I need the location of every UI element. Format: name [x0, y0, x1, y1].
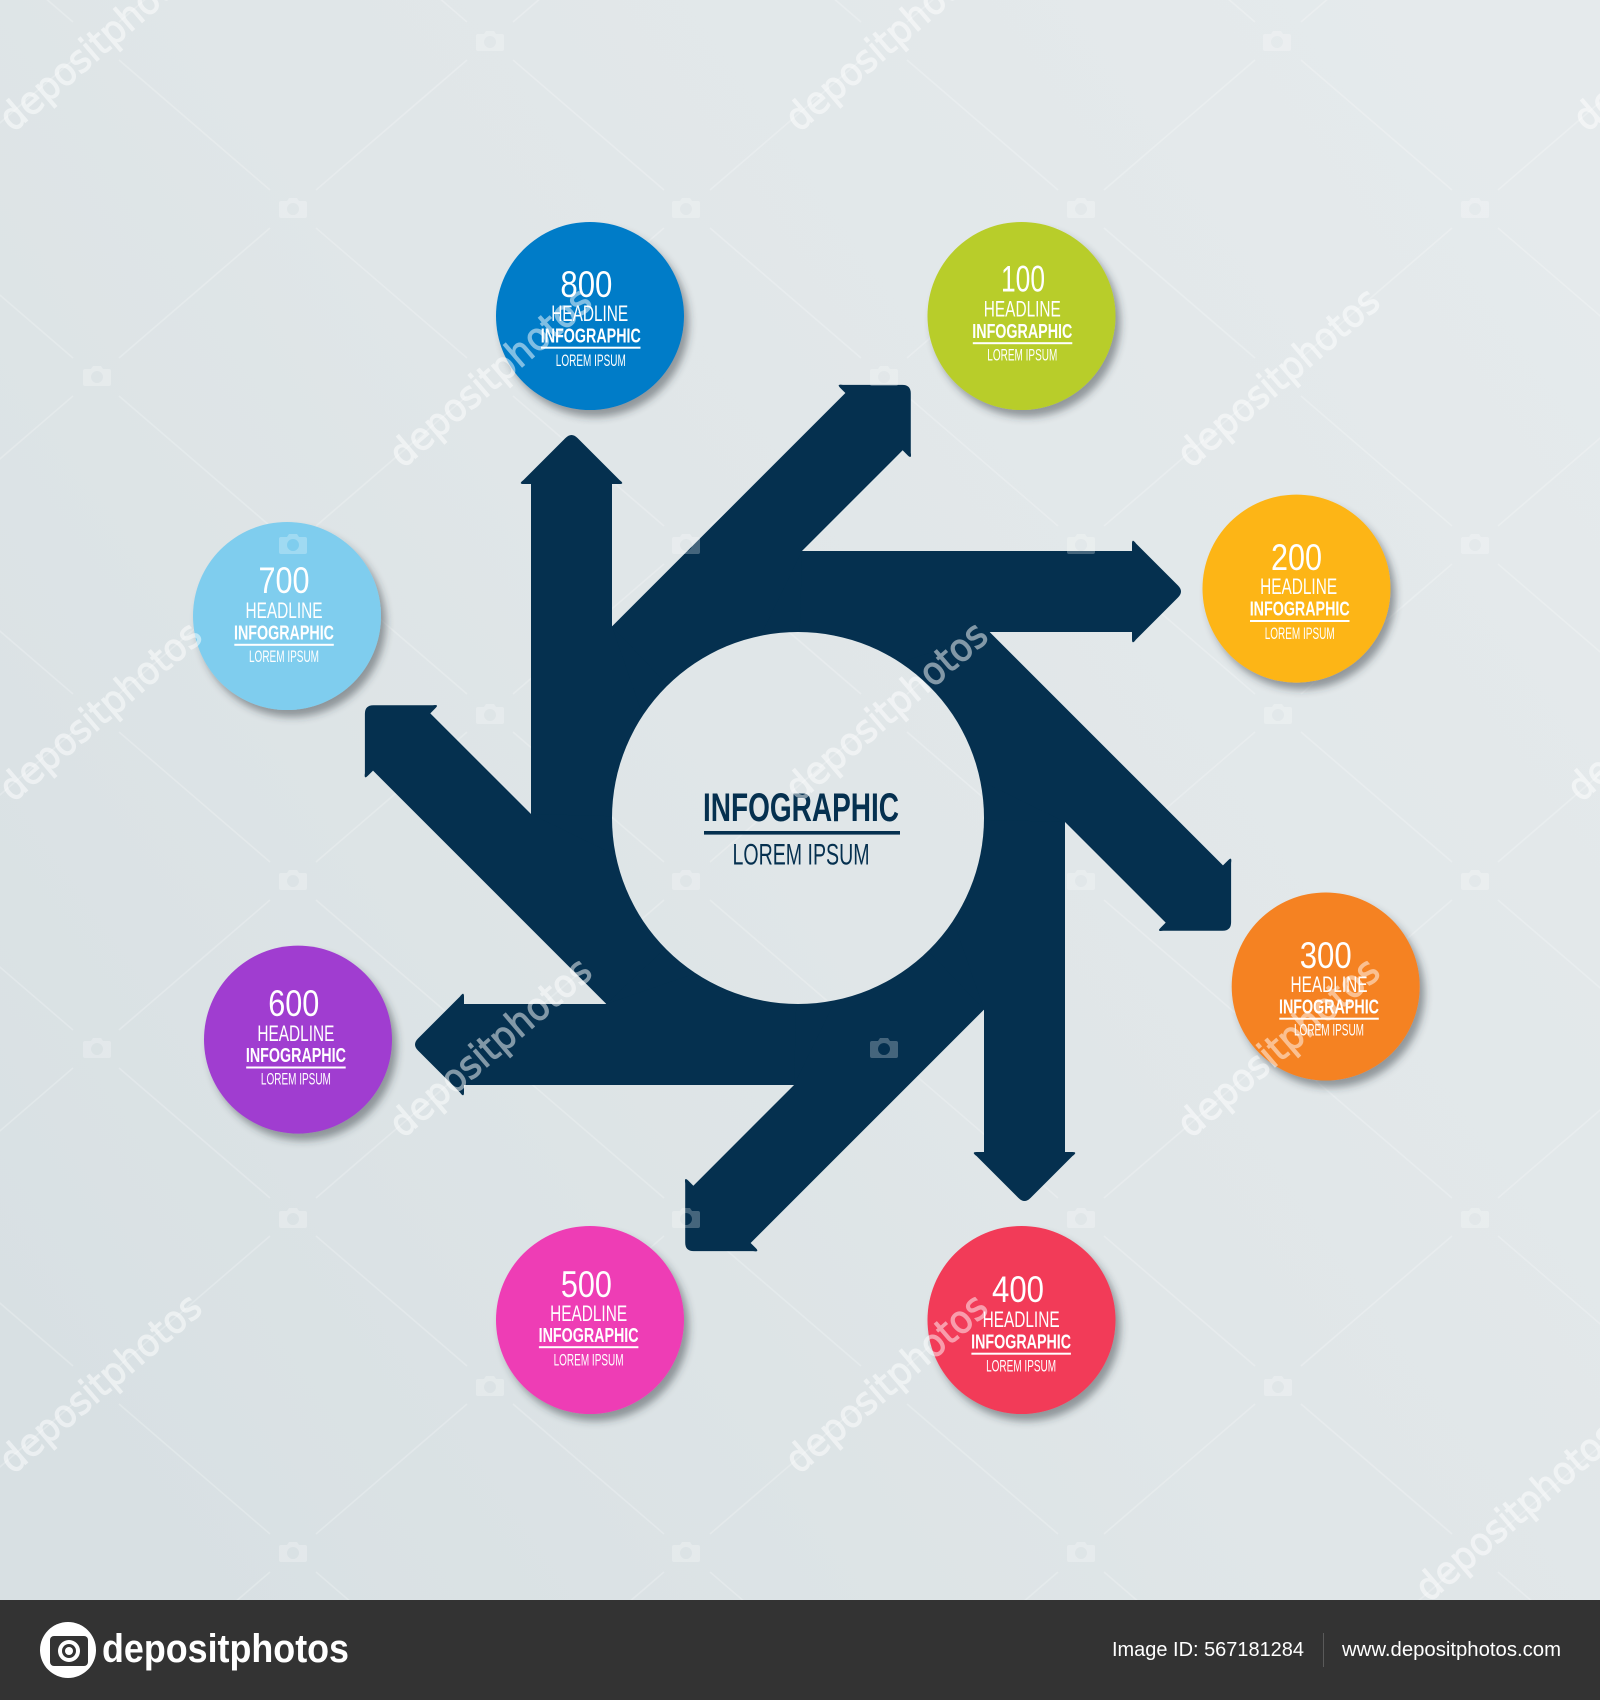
node 300: HEADLINE [1290, 972, 1368, 997]
node 600 [204, 946, 392, 1134]
watermark text: depositphotos [776, 612, 996, 810]
node 600: HEADLINE [257, 1021, 334, 1046]
arrow to 200 [802, 540, 1181, 642]
center title: LOREM IPSUM [732, 838, 870, 872]
node 800: INFOGRAPHIC [541, 325, 641, 347]
watermark text: depositphotos [1168, 278, 1388, 476]
node 700: 700 [258, 560, 310, 601]
node 200: HEADLINE [1260, 574, 1337, 599]
footer logo wordmark: depositphotos [102, 1627, 349, 1671]
node 500: 500 [561, 1264, 612, 1305]
node 100: 100 [1001, 258, 1045, 300]
node 700: INFOGRAPHIC [234, 622, 334, 644]
watermark text: depositphotos [380, 948, 600, 1146]
footer website: www.depositphotos.com [1341, 1639, 1561, 1661]
node 500: INFOGRAPHIC [539, 1325, 639, 1347]
node 100: LOREM IPSUM [987, 346, 1057, 364]
node 700 [193, 522, 381, 710]
node 600: INFOGRAPHIC [246, 1045, 346, 1067]
node 400: LOREM IPSUM [986, 1358, 1056, 1376]
hub [531, 551, 1065, 1085]
center arrow wheel [364, 384, 1232, 1252]
node 600: LOREM IPSUM [261, 1070, 331, 1088]
footer image id: Image ID: 567181284 [1112, 1639, 1304, 1661]
watermark text: depositphotos [776, 1284, 996, 1482]
node 400: HEADLINE [983, 1307, 1060, 1332]
arrow to 700 [364, 705, 606, 1004]
node 800 [496, 222, 684, 410]
node 400: INFOGRAPHIC [971, 1331, 1071, 1353]
node 200 [1202, 495, 1390, 683]
node 200: 200 [1271, 537, 1322, 578]
node 100 [928, 222, 1116, 410]
node 600: 600 [268, 983, 319, 1024]
arrow to 600 [415, 994, 794, 1096]
arrow to 800 [520, 435, 622, 814]
node 300: 300 [1300, 935, 1352, 976]
node 800: LOREM IPSUM [556, 352, 626, 370]
arrow to 400 [974, 822, 1076, 1201]
center title [703, 786, 900, 872]
node 800: HEADLINE [551, 301, 628, 326]
arrow to 500 [685, 1010, 984, 1252]
node 100: HEADLINE [984, 296, 1061, 322]
arrow to 300 [990, 632, 1232, 931]
node 300 [1232, 892, 1420, 1080]
node 400 [928, 1226, 1116, 1414]
node 500 [496, 1226, 684, 1414]
node 400: 400 [992, 1269, 1044, 1310]
watermark text: depositphotos [380, 278, 600, 476]
node 200: INFOGRAPHIC [1250, 598, 1350, 620]
watermark camera icons [83, 31, 1489, 1562]
node 500: LOREM IPSUM [554, 1352, 624, 1370]
arrow to 100 [612, 384, 911, 626]
center title: INFOGRAPHIC [703, 786, 899, 830]
node 700: HEADLINE [246, 598, 322, 623]
footer bar [0, 1600, 1600, 1700]
node 200: LOREM IPSUM [1265, 625, 1335, 643]
node 700: LOREM IPSUM [249, 648, 319, 666]
node 300: LOREM IPSUM [1294, 1022, 1364, 1040]
footer logo icon [40, 1622, 96, 1678]
node 300: INFOGRAPHIC [1279, 996, 1379, 1018]
node 500: HEADLINE [550, 1301, 627, 1326]
watermark text: depositphotos [1168, 948, 1388, 1146]
node 800: 800 [560, 264, 612, 305]
node 100: INFOGRAPHIC [972, 321, 1072, 343]
